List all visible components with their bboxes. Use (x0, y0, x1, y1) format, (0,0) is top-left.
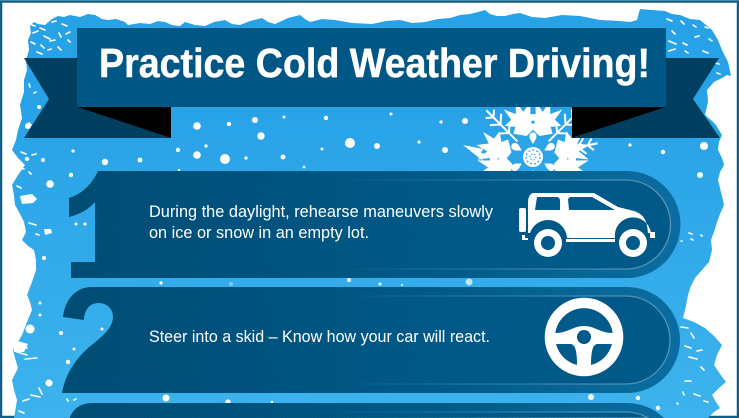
icon: steering wheel (545, 298, 623, 376)
left ribbon fold (77, 107, 171, 138)
title: Practice Cold Weather Driving! (99, 40, 650, 86)
banner (77, 28, 666, 107)
step 2 text: Steer into a skid – Know how your car will react. (149, 327, 490, 346)
falling snow dots (25, 105, 708, 410)
white frost clumps (14, 194, 52, 352)
numeral 1 pill shape (69, 171, 680, 278)
icon: car (519, 193, 655, 257)
numeral 2 pill shape (62, 287, 680, 393)
step 3 panel (cropped) (70, 403, 664, 418)
right ribbon fold (572, 107, 666, 138)
step 1 text: During the daylight, rehearse maneuvers slowly (149, 202, 494, 221)
snowflake (463, 96, 599, 218)
right ribbon tail (572, 58, 720, 138)
step 1 panel (69, 171, 680, 278)
left ribbon tail (24, 58, 171, 138)
step 2 panel (62, 287, 680, 393)
step 1 text: on ice or snow in an empty lot. (149, 223, 369, 242)
title ribbon (24, 28, 720, 138)
